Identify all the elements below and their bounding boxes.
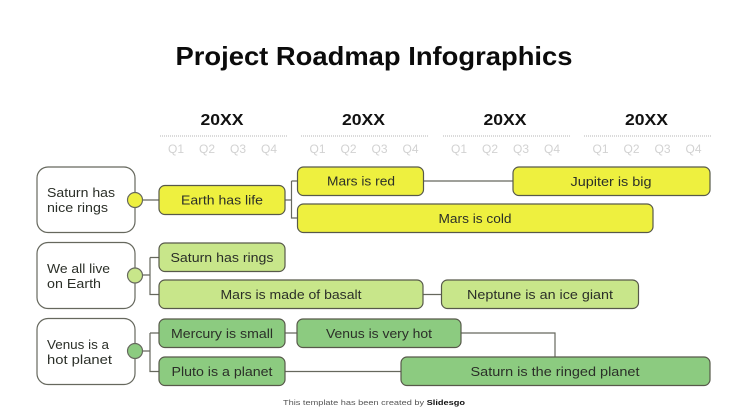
bar: Pluto is a planet: Pluto is a planet [172, 364, 273, 379]
year 2: 20XX [342, 112, 386, 129]
label: Venus is a hot planet: hot planet [47, 352, 112, 367]
bar: Mars is red [298, 167, 424, 196]
label: Saturn has nice rings: nice rings [47, 200, 109, 215]
node circle [128, 344, 142, 358]
bar: Saturn has rings [159, 243, 285, 272]
bar: Neptune is an ice giant: Neptune is an ice giant [467, 287, 613, 302]
year 4: Q4 [685, 142, 702, 156]
year 3: Q2 [482, 142, 498, 156]
footer credit: This template has been created by Slidesgo [283, 398, 466, 407]
year 4: Q3 [654, 142, 671, 156]
node circle [128, 192, 142, 208]
year 2 [301, 112, 428, 156]
label: We all live on Earth: We all live [47, 261, 110, 276]
year 2: Q1 [309, 142, 326, 156]
bar: Venus is very hot: Venus is very hot [326, 326, 432, 341]
title: Project Roadmap Infographics [176, 41, 572, 71]
bar: Neptune is an ice giant [442, 280, 638, 308]
year 4: Q2 [623, 142, 640, 156]
label: Saturn has nice rings: Saturn has [47, 185, 116, 200]
timeline header [160, 112, 711, 156]
year 1: Q3 [230, 142, 246, 156]
row 3: green [37, 318, 710, 386]
bar: Mars is red: Mars is red [327, 174, 395, 188]
year 1: Q4 [261, 142, 277, 156]
row 1: yellow [37, 167, 710, 232]
year 1 [160, 112, 287, 156]
row 2: light green [37, 242, 638, 308]
node circle [128, 268, 142, 283]
bar: Pluto is a planet [159, 357, 285, 386]
bar: Saturn is the ringed planet: Saturn is the ringed planet [470, 364, 640, 379]
bar: Mars is made of basalt: Mars is made of basalt [220, 287, 362, 302]
bar: Mars is cold: Mars is cold [438, 211, 512, 226]
label: We all live on Earth: on Earth [47, 276, 101, 291]
bar: Saturn has rings: Saturn has rings [170, 250, 274, 265]
year 3: Q3 [513, 142, 529, 156]
bar: Mercury is small [159, 319, 285, 348]
bar: Mars is made of basalt [159, 280, 423, 308]
year 3: Q4 [544, 142, 560, 156]
bar: Venus is very hot [297, 319, 461, 348]
year 1: 20XX [200, 112, 244, 129]
bar: Jupiter is big [513, 167, 710, 196]
year 3: 20XX [484, 112, 527, 129]
bar: Earth has life: Earth has life [181, 192, 263, 208]
year 3: Q1 [451, 142, 467, 156]
year 4: Q1 [592, 142, 609, 156]
year 2: Q3 [371, 142, 388, 156]
label: Venus is a hot planet [37, 318, 135, 384]
year 2: Q2 [340, 142, 357, 156]
year 3 [443, 112, 570, 156]
bar: Jupiter is big: Jupiter is big [570, 174, 652, 189]
bar: Mercury is small: Mercury is small [171, 326, 273, 341]
label: We all live on Earth [37, 242, 135, 308]
year 1: Q1 [168, 142, 184, 156]
bar: Earth has life [159, 186, 285, 214]
bar: Mars is cold [298, 204, 653, 232]
year 4 [584, 112, 711, 156]
connector lines [135, 181, 555, 372]
label: Saturn has nice rings [37, 167, 135, 232]
year 1: Q2 [199, 142, 215, 156]
label: Venus is a hot planet: Venus is a [47, 337, 110, 352]
year 2: Q4 [402, 142, 419, 156]
year 4: 20XX [625, 112, 669, 129]
bar: Saturn is the ringed planet [401, 357, 710, 386]
